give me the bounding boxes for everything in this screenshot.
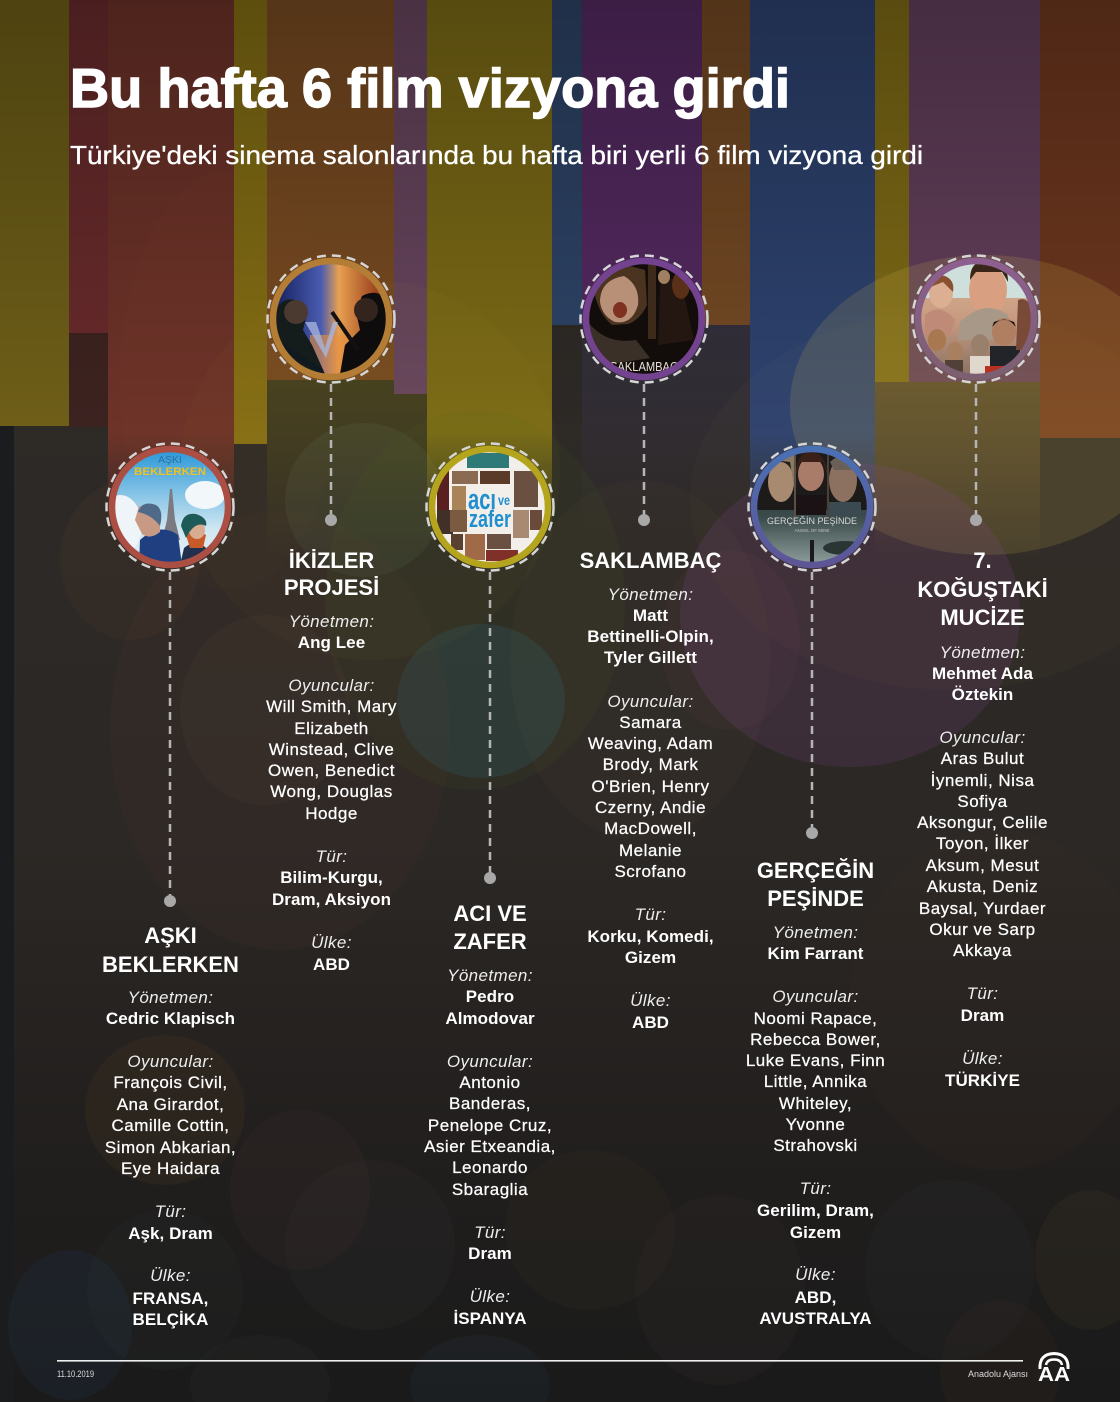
film info: 7. Koğuştaki Mucize: Akkaya [953,941,1012,960]
film info: Gerçeğin Peşinde: Gerilim, Dram, [757,1201,874,1220]
film info: Saklambaç: Melanie [619,841,682,860]
film info: Gerçeğin Peşinde: Kim Farrant [768,944,864,963]
film info: Aşkı Beklerken: Tür: [155,1202,186,1221]
poster: İkizler Projesi [268,256,394,382]
film info: İkizler Projesi: Wong, Douglas [270,782,393,801]
film info: Saklambaç: Brody, Mark [603,755,698,774]
film info: 7. Koğuştaki Mucize: 7. [973,548,992,573]
icon: AA logo [1038,1354,1070,1386]
film info: Saklambaç: Scrofano [614,862,687,881]
film info: Aşkı Beklerken: Aşk, Dram [128,1224,213,1243]
film info: Aşkı Beklerken: Ana Girardot, [117,1095,224,1114]
film info: 7. Koğuştaki Mucize: MUCİZE [940,605,1025,630]
film info: Gerçeğin Peşinde: ABD, [795,1288,836,1307]
film info: Saklambaç: Samara [619,713,682,732]
film info: Saklambaç: Korku, Komedi, [587,927,714,946]
film info: Acı ve Zafer: Dram [468,1244,512,1263]
film info: 7. Koğuştaki Mucize: Ülke: [962,1049,1003,1068]
film info: 7. Koğuştaki Mucize: Öztekin [952,685,1013,704]
film info: Gerçeğin Peşinde: Ülke: [795,1265,836,1284]
subtitle: Türkiye'deki sinema salonlarında bu hafta biri yerli 6 film vizyona girdi [70,140,923,170]
film info: İkizler Projesi: Ang Lee [298,633,365,652]
film info: Gerçeğin Peşinde: Oyuncular: [772,987,859,1006]
film info: Gerçeğin Peşinde: Whiteley, [779,1094,852,1113]
film info: 7. Koğuştaki Mucize: Dram [961,1006,1004,1025]
film info: Acı ve Zafer: Sbaraglia [452,1180,528,1199]
poster: Gerçeğin Peşinde: GERÇEĞİN PEŞİNDE [767,516,857,526]
film info: Saklambaç: Oyuncular: [607,692,694,711]
film info: Gerçeğin Peşinde: Noomi Rapace, [754,1009,877,1028]
film info: Gerçeğin Peşinde: PEŞİNDE [767,886,864,911]
film info: İkizler Projesi: İKİZLER [289,548,374,573]
footer [57,1354,1070,1386]
film info: Aşkı Beklerken: François Civil, [113,1073,228,1092]
poster: Acı ve Zafer: ve [498,492,510,508]
film info: Aşkı Beklerken: Yönetmen: [128,988,213,1007]
film info: İkizler Projesi: Winstead, Clive [269,740,394,759]
film info: Saklambaç: ABD [632,1013,669,1032]
poster: Saklambaç: SAKLAMBAÇ [610,359,678,374]
film info: Saklambaç: O'Brien, Henry [592,777,709,796]
film info: İkizler Projesi [266,548,397,974]
date: 11.10.2019 [57,1369,94,1379]
film info: Acı ve Zafer [424,901,556,1328]
film info: Saklambaç: Yönetmen: [608,585,693,604]
poster: Aşkı Beklerken: AŞKI [158,454,182,466]
film info: 7. Koğuştaki Mucize: Aras Bulut [941,749,1024,768]
film info: 7. Koğuştaki Mucize: Mehmet Ada [932,664,1033,683]
film info: Gerçeğin Peşinde: Rebecca Bower, [750,1030,881,1049]
poster: Gerçeğin Peşinde [748,444,876,570]
film info: Aşkı Beklerken [102,923,239,1329]
film info: 7. Koğuştaki Mucize: İynemli, Nisa [931,771,1034,790]
film info: 7. Koğuştaki Mucize: KOĞUŞTAKİ [917,577,1048,602]
connector lines [164,384,982,907]
film info: Acı ve Zafer: Almodovar [445,1009,535,1028]
film info: İkizler Projesi: Hodge [305,804,358,823]
film info: Acı ve Zafer: Yönetmen: [447,966,533,985]
poster: Gerçeğin Peşinde: ANGEL OF MINE [794,528,830,533]
film info: İkizler Projesi: Elizabeth [294,719,369,738]
film info: Gerçeğin Peşinde: Strahovski [773,1136,858,1155]
icon: AA logo: AA [1038,1364,1070,1386]
poster: Saklambaç [580,256,708,382]
film info: Saklambaç: Bettinelli-Olpin, [587,627,714,646]
film info: Gerçeğin Peşinde: Gizem [790,1223,841,1242]
film info: Acı ve Zafer: ACI VE [453,901,527,926]
film info: Gerçeğin Peşinde: Little, Annika [764,1072,867,1091]
film info: Saklambaç: Czerny, Andie [595,798,706,817]
film info: 7. Koğuştaki Mucize: Okur ve Sarp [929,920,1036,939]
film info: Saklambaç [580,548,721,1032]
film info: Saklambaç: Matt [633,606,668,625]
film info: Aşkı Beklerken: BELÇİKA [133,1310,208,1329]
film info: Gerçeğin Peşinde: Yvonne [786,1115,845,1134]
colored bars [0,0,1120,580]
film info: İkizler Projesi: PROJESİ [284,575,379,600]
film info: 7. Koğuştaki Mucize [917,548,1048,1090]
title: Bu hafta 6 film vizyona girdi [70,57,790,119]
film info: Aşkı Beklerken: Simon Abkarian, [105,1138,236,1157]
poster: Aşkı Beklerken: BEKLERKEN [134,466,206,478]
film info: 7. Koğuştaki Mucize: Sofiya [957,792,1008,811]
film info: İkizler Projesi: Will Smith, Mary [266,697,397,716]
film info: Acı ve Zafer: İSPANYA [453,1309,527,1328]
film info: Saklambaç: Tyler Gillett [604,648,697,667]
film info: Aşkı Beklerken: Eye Haidara [121,1159,220,1178]
film info: Aşkı Beklerken: Ülke: [150,1266,191,1285]
poster: Acı ve Zafer: acı [468,484,496,516]
film info: Acı ve Zafer: Oyuncular: [447,1052,533,1071]
film info: Gerçeğin Peşinde [746,858,885,1328]
film info: İkizler Projesi: Bilim-Kurgu, [280,868,383,887]
film info: Gerçeğin Peşinde: Tür: [800,1179,831,1198]
film info: 7. Koğuştaki Mucize: Akusta, Deniz [927,877,1038,896]
film info: İkizler Projesi: Oyuncular: [288,676,375,695]
film info: 7. Koğuştaki Mucize: Oyuncular: [939,728,1026,747]
film info: İkizler Projesi: Yönetmen: [289,612,374,631]
film info: Gerçeğin Peşinde: Luke Evans, Finn [746,1051,885,1070]
film info: Saklambaç: MacDowell, [604,819,697,838]
poster: Acı ve Zafer [426,444,554,570]
film info: Acı ve Zafer: Banderas, [449,1094,531,1113]
film info: 7. Koğuştaki Mucize: Baysal, Yurdaer [919,899,1046,918]
source: Anadolu Ajansı [968,1369,1028,1379]
film info: 7. Koğuştaki Mucize: Tür: [967,984,998,1003]
film info: Acı ve Zafer: Antonio [459,1073,521,1092]
film info: Saklambaç: Weaving, Adam [588,734,713,753]
poster: 7. Koğuştaki Mucize [912,256,1040,382]
film info: Acı ve Zafer: Ülke: [470,1287,510,1306]
film info: İkizler Projesi: Dram, Aksiyon [272,890,391,909]
film info: Aşkı Beklerken: FRANSA, [133,1289,208,1308]
film info: 7. Koğuştaki Mucize: TÜRKİYE [945,1071,1020,1090]
film info: Saklambaç: Tür: [635,905,666,924]
film info: Aşkı Beklerken: Camille Cottin, [111,1116,230,1135]
film info: Acı ve Zafer: Tür: [474,1223,506,1242]
film info: Aşkı Beklerken: Oyuncular: [127,1052,214,1071]
film info: Aşkı Beklerken: Cedric Klapisch [106,1009,235,1028]
film info: Gerçeğin Peşinde: AVUSTRALYA [759,1309,872,1328]
poster: Aşkı Beklerken [98,444,234,570]
film info: Gerçeğin Peşinde: GERÇEĞİN [757,858,874,883]
film info: 7. Koğuştaki Mucize: Toyon, İlker [936,834,1029,853]
film info: Saklambaç: Ülke: [630,991,671,1010]
film info: İkizler Projesi: Ülke: [311,933,352,952]
film info: Aşkı Beklerken: AŞKI [144,923,197,948]
film info: İkizler Projesi: Owen, Benedict [268,761,395,780]
film info: 7. Koğuştaki Mucize: Aksongur, Celile [917,813,1048,832]
poster: Acı ve Zafer: zafer [469,506,511,533]
film info: Acı ve Zafer: Leonardo [452,1158,528,1177]
film info: Acı ve Zafer: Pedro [466,987,514,1006]
film info: Acı ve Zafer: ZAFER [453,929,527,954]
film info: İkizler Projesi: Tür: [316,847,347,866]
film info: 7. Koğuştaki Mucize: Yönetmen: [940,643,1025,662]
film info: Saklambaç: SAKLAMBAÇ [580,548,721,573]
film info: Aşkı Beklerken: BEKLERKEN [102,952,239,977]
film info: Acı ve Zafer: Penelope Cruz, [428,1116,552,1135]
film info: Gerçeğin Peşinde: Yönetmen: [773,923,858,942]
film info: Acı ve Zafer: Asier Etxeandia, [424,1137,556,1156]
film info: Saklambaç: Gizem [625,948,676,967]
film info: İkizler Projesi: ABD [313,955,350,974]
film info: 7. Koğuştaki Mucize: Aksum, Mesut [926,856,1039,875]
